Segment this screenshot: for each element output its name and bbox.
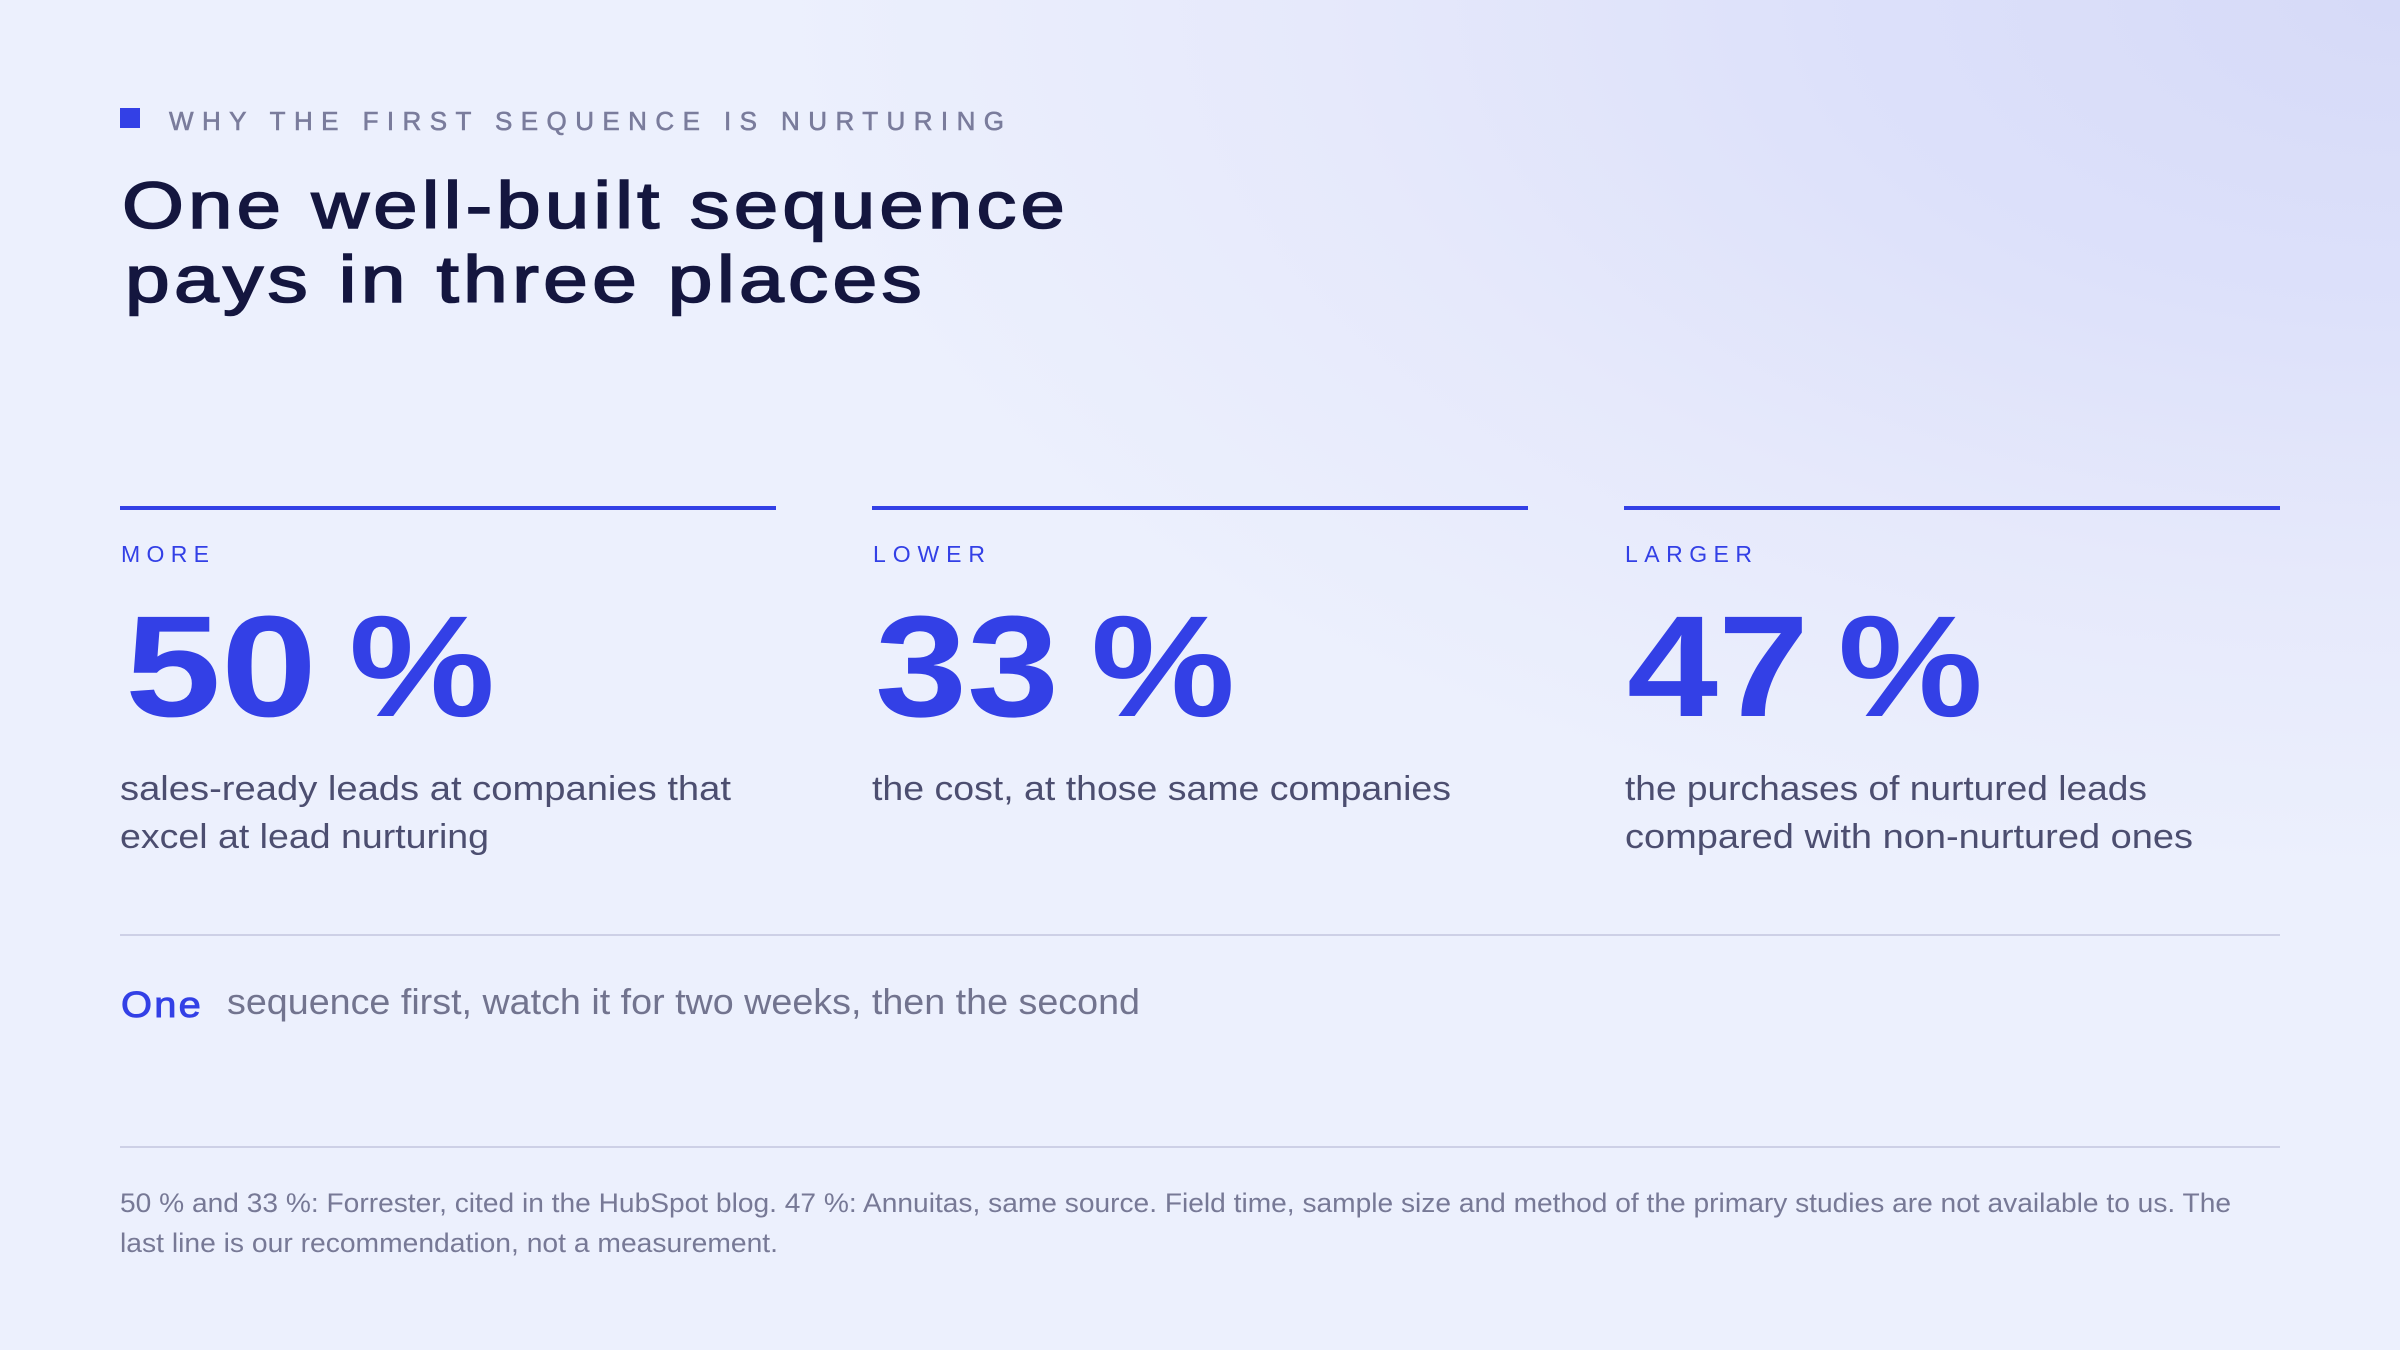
- stat: 47 %: %: [1838, 586, 1983, 747]
- stat: 50 %: 50: [125, 586, 317, 747]
- stat: 47 %: 47: [1627, 586, 1809, 747]
- stat: 50 %: %: [349, 586, 495, 747]
- title: One well-built sequence: [122, 168, 1069, 242]
- panel: lower: [872, 506, 1528, 808]
- footnote: last line is our recommendation, not a measurement.: [120, 1228, 778, 1258]
- title: [122, 168, 1069, 316]
- title: pays in three places: [125, 242, 926, 316]
- eyebrow label: WHY THE FIRST SEQUENCE IS NURTURING: [169, 106, 1004, 136]
- icon: eyebrow square: [120, 108, 140, 128]
- description: excel at lead nurturing: [120, 818, 489, 856]
- label: larger: LARGER: [1625, 541, 1752, 567]
- description: [1625, 770, 2193, 856]
- label: lower: LOWER: [873, 541, 985, 567]
- closing line: [121, 981, 1140, 1025]
- description: the cost, at those same companies: [872, 770, 1451, 808]
- description: [120, 770, 732, 856]
- panel: more: [120, 506, 776, 856]
- panel: larger: [1624, 506, 2280, 856]
- description: compared with non-nurtured ones: [1625, 818, 2193, 856]
- closing text: sequence first, watch it for two weeks, then the second: [227, 981, 1140, 1022]
- description: sales-ready leads at companies that: [120, 770, 732, 808]
- footnote: 50 % and 33 %: Forrester, cited in the HubSpot blog. 47 %: Annuitas, same source. Field time, sample size and method of the primary studies are not available to us. The: [120, 1188, 2231, 1218]
- stat: 33 %: 33: [875, 586, 1059, 747]
- footnote: [120, 1188, 2231, 1258]
- stat: 33 %: %: [1091, 586, 1235, 747]
- emphasis: one: One: [121, 984, 203, 1025]
- label: more: MORE: [121, 541, 209, 567]
- description: the purchases of nurtured leads: [1625, 770, 2147, 808]
